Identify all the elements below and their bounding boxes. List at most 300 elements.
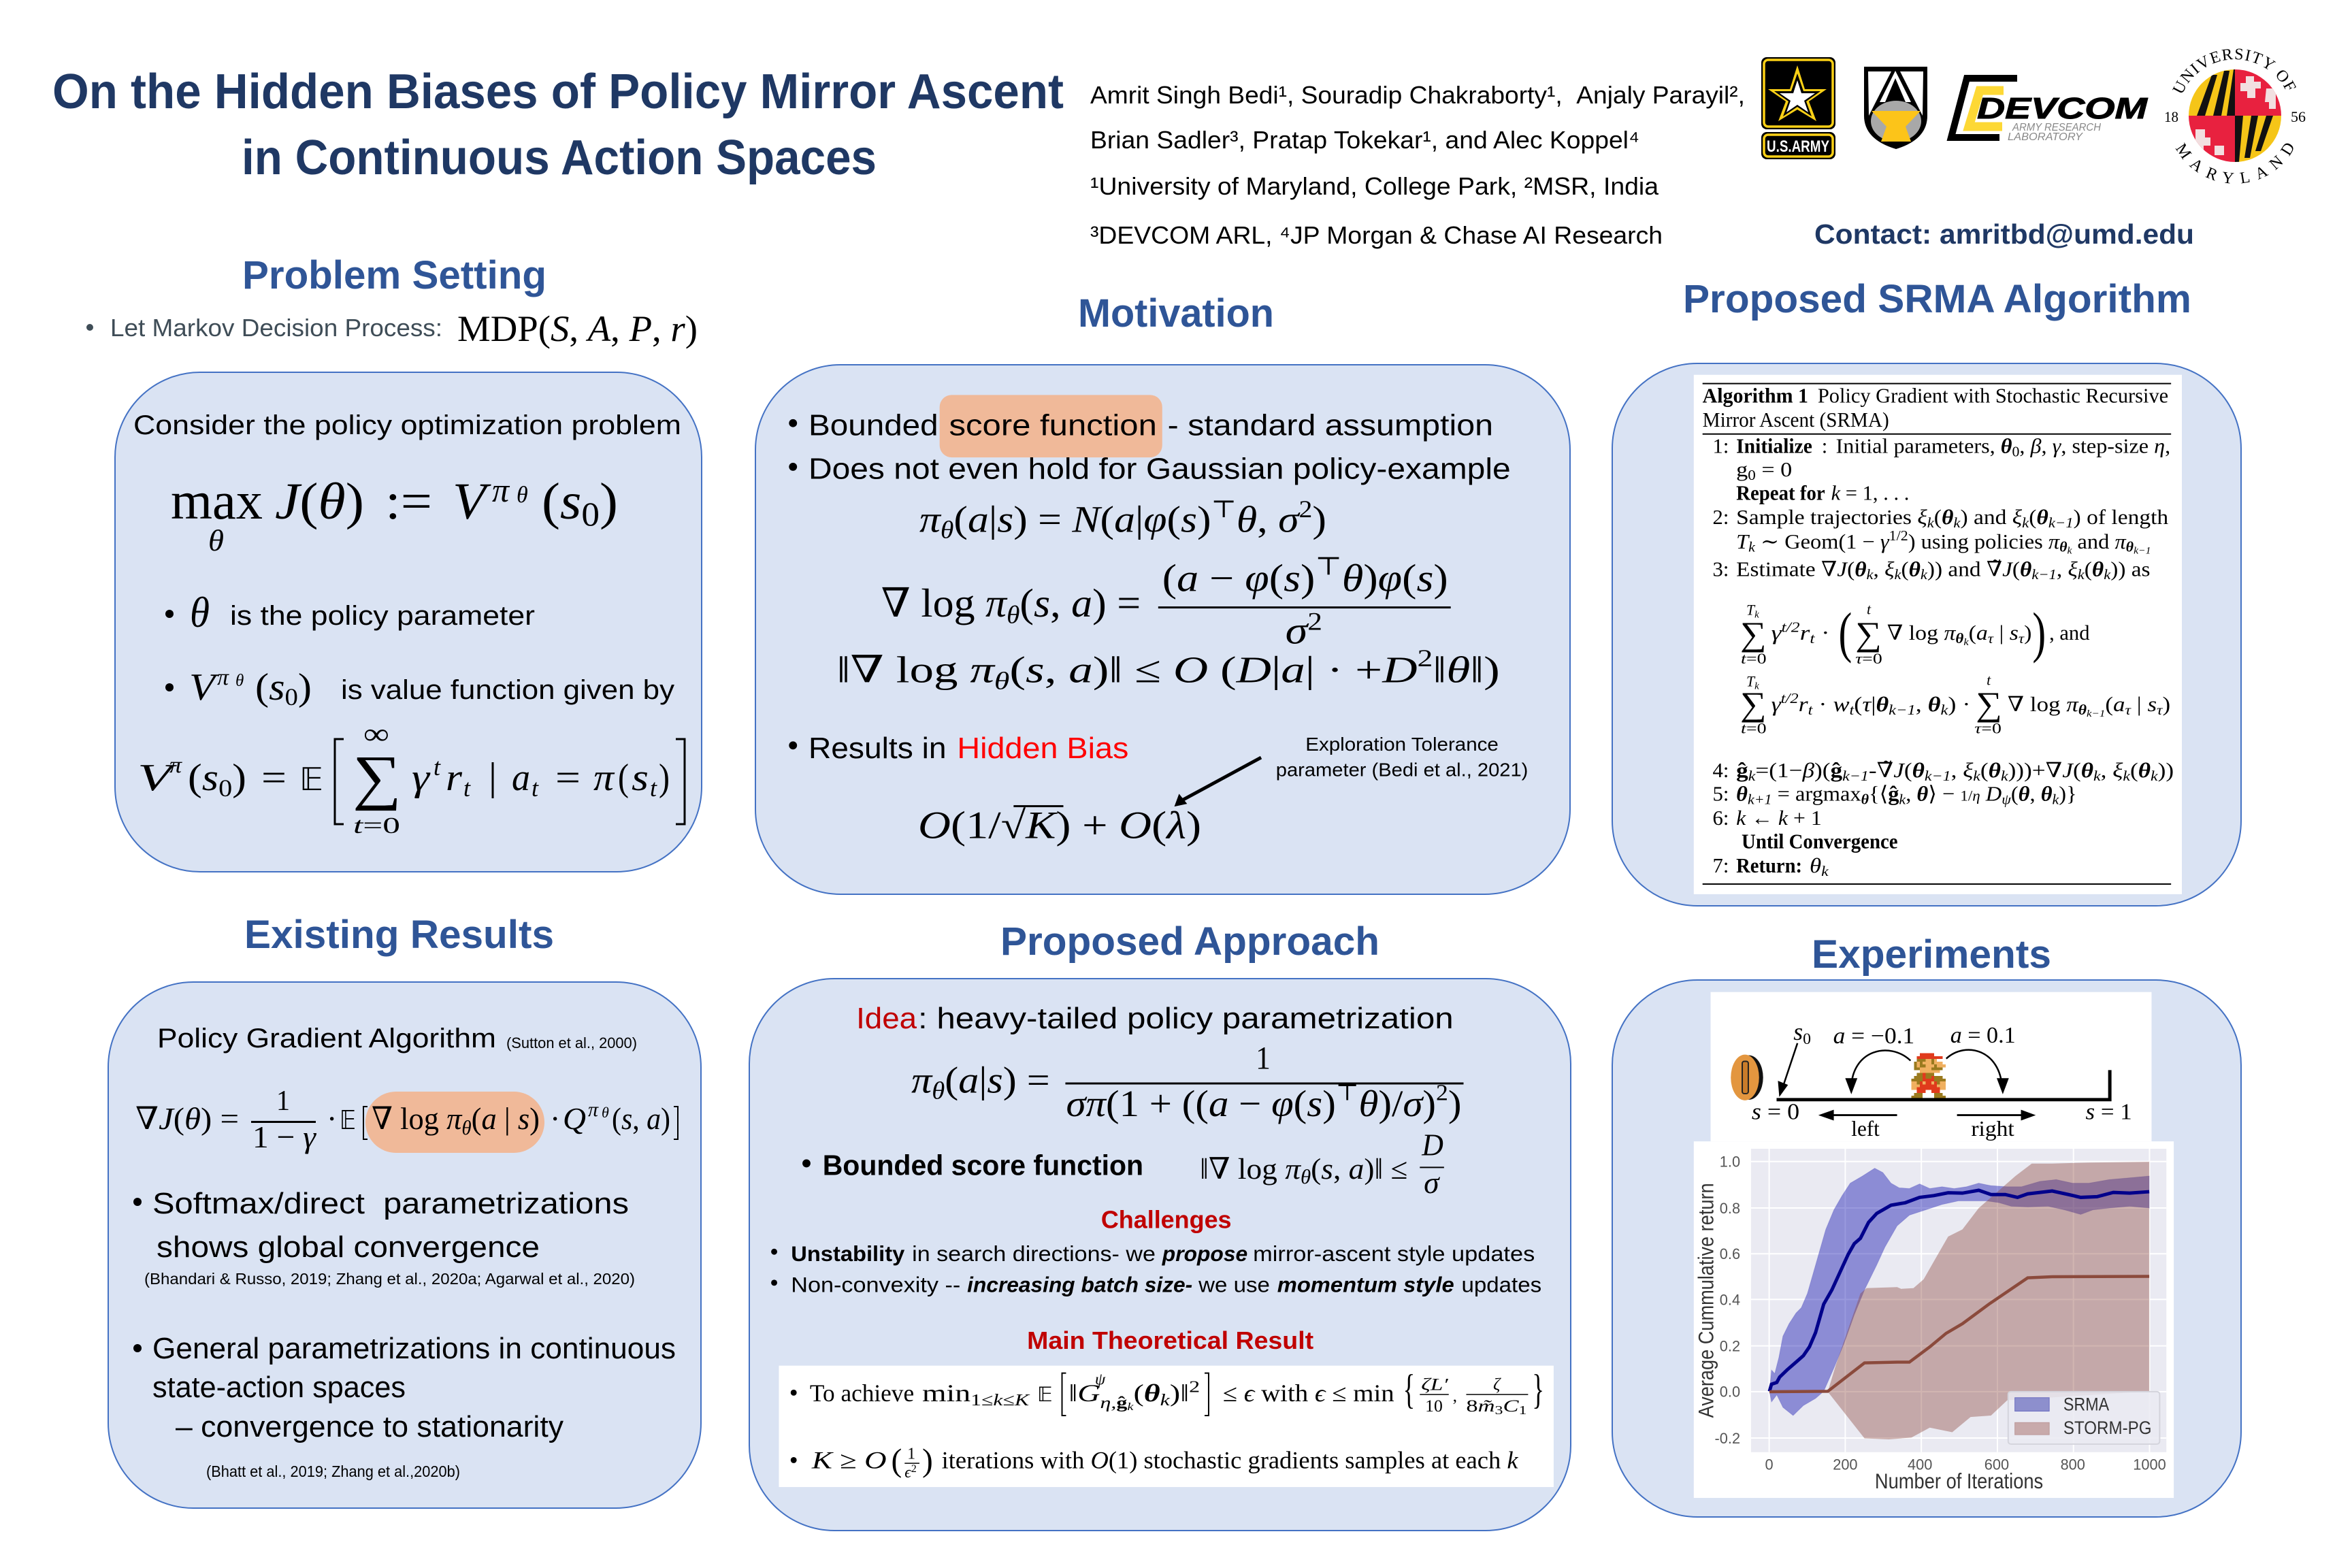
- algorithm steps: 0: [1748, 468, 1756, 483]
- algorithm steps 4 to 7: k: [1821, 864, 1829, 879]
- value function equation: t=0: [353, 813, 400, 838]
- policy gradient equation: Q: [563, 1101, 586, 1136]
- value function equation: [137, 717, 685, 838]
- bullet: softmax global convergence: (Bhandari & Russo, 2019; Zhang et al., 2020a; Agarwal et al., 2020): [144, 1270, 635, 1288]
- estimator sum 2: ,: [1916, 693, 1928, 716]
- algorithm steps: k: [2104, 568, 2111, 583]
- algorithm steps 4 to 7: 4:: [1713, 759, 1729, 782]
- estimator sum 2: k: [1940, 703, 1948, 718]
- value function equation: π: [169, 753, 182, 778]
- theorem box: k: [1160, 1391, 1171, 1409]
- algorithm steps 4 to 7: = argmax: [1771, 782, 1861, 805]
- diagram labels: [1752, 1018, 2132, 1141]
- estimator sum 1: τ: [2019, 632, 2025, 647]
- logo: University of Maryland seal: 56: [2291, 108, 2306, 125]
- algorithm steps: 1:: [1713, 434, 1729, 457]
- algorithm steps: :: [1822, 434, 1827, 457]
- Gaussian policy equation: , σ: [1257, 499, 1296, 540]
- policy gradient equation: ·: [550, 1101, 560, 1136]
- diagram labels: a = −0.1: [1833, 1024, 1914, 1049]
- estimator sum 2: ∑: [1740, 685, 1767, 723]
- algorithm steps: ,: [2057, 557, 2068, 581]
- algorithm steps: k: [1953, 516, 1961, 531]
- algorithm steps: 3:: [1713, 557, 1729, 581]
- bullet: bounded score function: - standard assumption: [1168, 410, 1493, 442]
- algorithm steps: k: [1748, 540, 1756, 555]
- bullet: hidden bias: Hidden Bias: [957, 732, 1128, 765]
- heading: Proposed SRMA Algorithm: Proposed SRMA Algorithm: [1683, 277, 2191, 321]
- logo: U.S. Army: U.S.ARMY: [1767, 137, 1829, 156]
- heavy-tailed policy equation: 2: [1436, 1080, 1448, 1105]
- heavy-tailed policy equation: θ: [1358, 1083, 1378, 1124]
- algorithm steps 4 to 7: k: [2123, 769, 2131, 784]
- theorem box: ,: [1453, 1386, 1457, 1405]
- policy gradient equation: θ: [602, 1104, 609, 1121]
- algorithm steps: ξ: [2012, 506, 2023, 529]
- bounded score function result: θ: [1301, 1166, 1311, 1188]
- theorem box: ‖G: [1068, 1379, 1095, 1407]
- bullet: policy parameter: [165, 588, 535, 636]
- Gaussian policy equation: ): [1312, 499, 1326, 540]
- estimator sum 2: ∑: [1976, 685, 2002, 723]
- Gaussian policy equation: 2: [1299, 495, 1312, 523]
- bullet: hidden bias: Results in: [808, 732, 947, 765]
- algorithm steps: ) and: [1960, 506, 2012, 529]
- algorithm steps 4 to 7: k−1: [1925, 769, 1951, 784]
- algorithm steps: Repeat for: [1736, 482, 1825, 505]
- challenges list: mirror-ascent style updates: [1253, 1241, 1535, 1266]
- algorithm steps: π: [2048, 530, 2061, 553]
- estimator sum 2: γ: [1771, 693, 1782, 716]
- score norm bound: θ: [994, 667, 1009, 694]
- heavy-tailed policy equation: σπ(1 + ((a − φ(s): [1066, 1083, 1335, 1124]
- theorem box: 𝔼: [1037, 1382, 1053, 1406]
- panel: existing results: [108, 982, 701, 1508]
- estimator sum 1: t/2: [1782, 620, 1800, 635]
- algorithm steps: )) as: [2110, 557, 2150, 581]
- algorithm steps: (: [2029, 506, 2036, 529]
- experiments contents: [1693, 992, 2174, 1498]
- bullet: value function: is value function given by: [341, 675, 674, 705]
- bounded score function result: D: [1421, 1127, 1443, 1162]
- theorem box: ϵ: [904, 1464, 911, 1482]
- algorithm title: Algorithm 1: [1703, 384, 1808, 407]
- theorem box: 8m̃: [1466, 1396, 1490, 1416]
- theorem box: iterations with O(1) stochastic gradients samples at each k: [942, 1446, 1519, 1473]
- authors and affiliations: Brian Sadler³, Pratap Tokekar¹, and Alec Koppel⁴: [1090, 126, 1639, 154]
- authors and affiliations: Amrit Singh Bedi¹, Souradip Chakraborty¹, Anjaly Parayil²,: [1090, 81, 1745, 109]
- value function equation: s: [632, 757, 649, 799]
- value function equation: =: [261, 757, 287, 799]
- objective equation: θ: [517, 483, 528, 508]
- estimator sum 1: k: [1963, 637, 1969, 648]
- heading: Proposed Approach: Proposed Approach: [1000, 919, 1379, 964]
- estimator sum 1: ·: [1815, 621, 1830, 644]
- heavy-tailed policy equation: [911, 1041, 1463, 1124]
- score norm bound: s, a)‖ ≤ O (D|a| · + D: [1026, 649, 1409, 691]
- value function equation: t: [650, 774, 657, 802]
- arrow: right: [1957, 1110, 2036, 1120]
- algorithm steps: ) using policies: [1908, 530, 2048, 553]
- heavy-tailed policy equation: a|s) =: [958, 1059, 1046, 1100]
- algorithm steps: k−1: [2134, 546, 2151, 557]
- estimator sum 1: a: [1976, 621, 1988, 644]
- estimator sum 2: ∇ log π: [2008, 693, 2077, 716]
- algorithm steps 4 to 7: k: [1973, 769, 1981, 784]
- value function equation: ): [232, 757, 246, 799]
- algorithm steps: Initialize: [1736, 434, 1812, 457]
- algorithm steps 4 to 7: ξ: [1963, 759, 1974, 782]
- logo: DEVCOM Army Research Laboratory: [1951, 78, 2149, 143]
- estimator sum 1: ): [2024, 621, 2031, 644]
- chart axes labels: 0.6: [1720, 1245, 1740, 1262]
- estimator sum 1: r: [1800, 621, 1811, 644]
- policy gradient equation: ∇ log π: [372, 1101, 462, 1136]
- estimator sum 2: k−1: [1889, 703, 1916, 718]
- score function equation: σ: [1286, 609, 1309, 652]
- estimator sum 1: ∇ log π: [1887, 621, 1955, 644]
- algorithm steps 4 to 7: ĝ: [1736, 759, 1749, 782]
- estimator sum 2: [1740, 672, 2170, 737]
- challenges list: momentum style: [1277, 1273, 1454, 1297]
- track: [1776, 1070, 2110, 1100]
- estimator sum 2: θ: [2078, 703, 2087, 718]
- arrow: left: [1818, 1110, 1897, 1120]
- challenges list: Non-convexity --: [791, 1273, 960, 1297]
- algorithm steps: )) and: [1927, 557, 1987, 581]
- estimator sum 1: s: [2010, 621, 2019, 644]
- algorithm steps: ∇̃J(θ: [1987, 557, 2031, 581]
- value function equation: 𝔼: [299, 761, 323, 798]
- policy gradient heading: (Sutton et al., 2000): [506, 1034, 637, 1051]
- estimator sum 1: ): [2032, 601, 2046, 664]
- Gaussian policy equation: ⊤: [1211, 495, 1237, 523]
- bullet: general parametrizations: – convergence to stationarity: [176, 1410, 564, 1443]
- arrow: move left arc: [1845, 1050, 1910, 1094]
- bounded score function result: Bounded score function: [823, 1149, 1143, 1181]
- algorithm steps: ξ: [1884, 557, 1895, 581]
- challenges list: in search directions- we: [912, 1241, 1156, 1266]
- challenges list: [771, 1241, 1541, 1297]
- chart axes labels: 1.0: [1720, 1154, 1740, 1171]
- value function equation: r: [446, 757, 462, 799]
- estimator sum 2: t/2: [1781, 691, 1799, 706]
- algorithm steps 4 to 7: θ: [1736, 782, 1748, 805]
- bullet: general parametrizations: [133, 1332, 676, 1480]
- algorithm steps: T: [1736, 530, 1750, 553]
- algorithm steps 4 to 7: θ⟩ − 1/η D: [1916, 782, 2001, 805]
- estimator sum 2: t: [1850, 703, 1855, 718]
- estimator sum 2: τ: [2125, 703, 2132, 718]
- challenges list: Unstability: [791, 1241, 905, 1266]
- algorithm steps: θ: [1909, 557, 1921, 581]
- authors and affiliations: ³DEVCOM ARL, ⁴JP Morgan & Chase AI Research: [1090, 221, 1663, 249]
- theorem box: C: [1503, 1396, 1520, 1416]
- bounded score function result: ‖∇ log π: [1200, 1153, 1300, 1186]
- policy gradient equation: 1 − γ: [252, 1120, 317, 1154]
- estimator sum 1: ∑: [1740, 615, 1767, 653]
- bullet: softmax global convergence: Softmax/direct parametrizations: [152, 1187, 629, 1220]
- policy gradient equation: 1: [276, 1085, 290, 1117]
- algorithm title: Mirror Ascent (SRMA): [1703, 408, 1889, 431]
- value function equation: t: [463, 774, 471, 802]
- algorithm steps: k: [2078, 568, 2085, 583]
- diagram labels: a = 0.1: [1950, 1023, 2016, 1048]
- bullet: hidden bias: [789, 732, 1128, 765]
- diagram labels: left: [1851, 1117, 1880, 1141]
- algorithm steps: k−1: [2031, 568, 2057, 583]
- bullet: policy parameter: is the policy parameter: [230, 601, 535, 631]
- bounded score function result: s, a)‖ ≤: [1321, 1153, 1406, 1186]
- diagram labels: s: [1793, 1018, 1803, 1045]
- objective equation: J(θ): [275, 473, 364, 530]
- policy gradient equation: ∇J(θ) =: [135, 1101, 239, 1136]
- value function equation: γ: [412, 757, 431, 799]
- estimator sum 2: w: [1833, 693, 1850, 716]
- bullet: value function: θ: [235, 672, 244, 690]
- authors and affiliations: ¹University of Maryland, College Park, ²MSR, India: [1090, 172, 1659, 200]
- value function equation: ∞: [363, 717, 389, 751]
- problem statement text: Consider the policy optimization problem: [133, 410, 681, 440]
- bullet: value function: [165, 665, 674, 710]
- value function equation: t: [532, 774, 539, 802]
- score function equation: θ: [1342, 557, 1363, 600]
- estimator sum 1: τ=0: [1855, 651, 1882, 667]
- contact: Contact: amritbd@umd.edu: [1814, 218, 2194, 250]
- logo: DEVCOM Army Research Laboratory: ARMY RESEARCH: [2012, 122, 2101, 133]
- chart axes labels: -0.2: [1715, 1430, 1740, 1447]
- value function equation: V: [137, 757, 177, 799]
- algorithm steps: θ: [1942, 506, 1953, 529]
- value function equation: π: [593, 757, 615, 799]
- diagram labels: right: [1971, 1117, 2014, 1141]
- main theoretical result heading: Main Theoretical Result: [1027, 1327, 1313, 1354]
- algorithm steps 4 to 7: J(θ: [1893, 759, 1923, 782]
- logo: DEVCOM Army Research Laboratory: DEVCOM: [1977, 92, 2149, 125]
- chart axes labels: 400: [1908, 1456, 1932, 1473]
- bounded score function result: (: [1311, 1153, 1321, 1186]
- heavy-tailed policy equation: )/σ): [1378, 1083, 1435, 1124]
- chart axes labels: 200: [1833, 1456, 1858, 1473]
- algorithm steps 4 to 7: Until Convergence: [1742, 830, 1898, 853]
- score norm bound: ‖: [1433, 649, 1446, 691]
- bullet: bounded score function: [789, 410, 1493, 442]
- estimator sum 2: k−1: [2087, 708, 2105, 719]
- algorithm steps: θ: [2036, 506, 2048, 529]
- heading: Experiments: Experiments: [1812, 932, 2051, 977]
- algorithm steps 4 to 7: ,: [2101, 759, 2112, 782]
- theorem box: θ: [1144, 1379, 1160, 1407]
- bullet: value function: ): [298, 666, 312, 708]
- algorithm steps 4 to 7: )}: [2059, 782, 2077, 805]
- algorithm steps 4 to 7: θ: [2138, 759, 2151, 782]
- panel: experiments: [1612, 980, 2241, 1517]
- chart legend: STORM-PG: [2063, 1418, 2151, 1438]
- algorithm steps 4 to 7: (: [2011, 782, 2019, 805]
- policy gradient heading: Policy Gradient Algorithm: [157, 1024, 496, 1054]
- algorithm steps: Initial parameters, θ: [1836, 434, 2012, 457]
- score function equation: [881, 553, 1451, 652]
- bullet: value function: 0: [285, 683, 298, 710]
- objective equation: :=: [385, 473, 432, 530]
- estimator sum 2: ) ·: [1948, 693, 1970, 716]
- estimator sum 1: τ: [1988, 632, 1995, 647]
- estimator sum 2: (: [1854, 693, 1862, 716]
- score function equation: 2: [1307, 608, 1322, 636]
- algorithm steps 4 to 7: )): [2158, 759, 2174, 782]
- algorithm steps 4 to 7: ,: [1951, 759, 1963, 782]
- theorem box: 3: [1495, 1403, 1503, 1417]
- algorithm steps 4 to 7: k: [2053, 792, 2059, 807]
- algorithm steps 4 to 7: -∇̃: [1869, 759, 1893, 782]
- environment diagram: [1711, 992, 2151, 1141]
- bullet: softmax global convergence: [133, 1187, 635, 1288]
- idea sentence: Idea: [856, 1002, 917, 1035]
- algorithm steps: γ: [1880, 530, 1890, 553]
- annotation: exploration tolerance: parameter (Bedi et al., 2021): [1276, 760, 1528, 781]
- algorithm steps: θ: [2092, 557, 2104, 581]
- heavy-tailed policy equation: π: [911, 1059, 934, 1100]
- score norm bound: θ‖): [1446, 649, 1493, 691]
- objective equation: π: [492, 471, 510, 509]
- score function equation: (: [1019, 581, 1034, 625]
- logo: U.S. Army: [1761, 57, 1835, 159]
- convergence rate equation: O(1/√ K) + O(λ): [918, 804, 1201, 847]
- algorithm steps 4 to 7: ĝ: [1888, 782, 1899, 805]
- estimator sum 1: k: [1754, 610, 1759, 621]
- algorithm steps 4 to 7: β)(ĝ: [1803, 759, 1841, 782]
- algorithm steps: k: [1921, 568, 1928, 583]
- bullet: general parametrizations: state-action spaces: [152, 1371, 406, 1404]
- estimator sum 1: T: [1746, 602, 1754, 619]
- estimator sum 1: ∑: [1855, 615, 1882, 653]
- chart axes labels: 800: [2061, 1456, 2085, 1473]
- value function equation: (s: [188, 757, 217, 799]
- objective equation: max: [171, 471, 263, 530]
- chart axes labels: 0.0: [1720, 1384, 1740, 1401]
- chart axes labels: 1000: [2133, 1456, 2166, 1473]
- algorithm steps: ,: [1874, 557, 1884, 581]
- algorithm title: [1703, 384, 2168, 431]
- objective equation: 0: [581, 495, 600, 533]
- theorem box: ζ: [1493, 1374, 1501, 1394]
- icon: mario: [1911, 1054, 1946, 1098]
- algorithm steps 4 to 7: {⟨: [1869, 782, 1888, 805]
- value function equation: t: [434, 753, 441, 781]
- algorithm box: [1694, 375, 2182, 894]
- algorithm steps: θ: [2126, 540, 2134, 555]
- estimator sum 2: (: [2105, 693, 2113, 716]
- estimator sum 1: t=0: [1741, 651, 1767, 667]
- estimator sum 2: ·: [1812, 693, 1833, 716]
- algorithm steps: ,: [2019, 434, 2025, 457]
- theorem box: 2: [911, 1463, 917, 1475]
- bullet: bounded score function: score function: [949, 410, 1157, 442]
- heading: Existing Results: Existing Results: [244, 913, 554, 957]
- algorithm steps 4 to 7: k: [1748, 769, 1756, 784]
- algorithm steps 4 to 7: J(θ: [2062, 759, 2092, 782]
- theorem box: η,: [1100, 1394, 1116, 1412]
- algorithm steps: β, γ, step-size η,: [2031, 434, 2170, 457]
- panel: problem setting: [115, 372, 702, 872]
- heading: Motivation: Motivation: [1078, 291, 1274, 336]
- algorithm steps 4 to 7: Return:: [1736, 854, 1802, 877]
- algorithm steps: ξ: [2068, 557, 2078, 581]
- estimator sum 1: [1740, 601, 2089, 667]
- chart axes labels: Number of Iterations: [1875, 1469, 2043, 1493]
- algorithm steps: k: [2067, 546, 2072, 557]
- arrow: s0 pointer: [1778, 1043, 1797, 1097]
- estimator sum 2: |: [2131, 693, 2147, 716]
- estimator sum 1: |: [1993, 621, 2010, 644]
- algorithm steps 4 to 7: 7:: [1713, 854, 1729, 877]
- logo: University of Maryland seal: UNIVERSITY OF: [2172, 49, 2296, 93]
- chart axes labels: 0.4: [1720, 1291, 1740, 1308]
- chart axes labels: 0.2: [1720, 1338, 1740, 1355]
- algorithm steps: and: [2072, 530, 2114, 553]
- policy gradient equation: θ: [461, 1117, 472, 1139]
- algorithm steps 4 to 7: k ← k + 1: [1736, 806, 1822, 830]
- authors and affiliations: [1090, 81, 1745, 249]
- estimator sum 1: (: [1838, 601, 1852, 664]
- chart axes labels: 0.8: [1720, 1200, 1740, 1217]
- policy gradient equation: (: [472, 1101, 481, 1136]
- chart axes labels: Average Cummulative return: [1693, 1183, 1718, 1418]
- title: On the Hidden Biases of Policy Mirror Ascent: [52, 65, 1064, 119]
- algorithm steps 4 to 7: k−1: [1842, 769, 1869, 784]
- algorithm steps: k: [1867, 568, 1874, 583]
- theorem box: (: [892, 1443, 902, 1478]
- chart legend: SRMA: [2063, 1394, 2109, 1415]
- estimator sum 1: θ: [1955, 632, 1964, 647]
- chart axes labels: [1693, 1154, 2166, 1493]
- theorem box: ): [922, 1443, 933, 1478]
- diagram labels: s = 1: [2086, 1100, 2132, 1124]
- title: [52, 65, 1064, 185]
- objective equation: θ: [208, 524, 224, 557]
- challenges list: updates: [1462, 1273, 1541, 1297]
- estimator sum 2: a: [2113, 693, 2125, 716]
- algorithm title: Policy Gradient with Stochastic Recursive: [1818, 384, 2168, 407]
- MDP bullet: [86, 308, 698, 349]
- chart: cumulative return: [1693, 1141, 2174, 1498]
- heavy-tailed policy equation: (: [945, 1059, 958, 1100]
- logo: DEVCOM Army Research Laboratory: LABORATORY: [2008, 131, 2083, 143]
- policy gradient equation: π: [588, 1098, 599, 1121]
- estimator sum 2: k: [1754, 681, 1759, 691]
- score norm bound: 2: [1418, 644, 1433, 672]
- algorithm steps: g: [1736, 458, 1746, 481]
- algorithm steps: 2:: [1713, 506, 1729, 529]
- objective equation: ): [600, 473, 618, 530]
- estimator sum 2: τ: [2157, 703, 2163, 718]
- Gaussian policy equation: θ: [1237, 499, 1257, 540]
- policy gradient equation: 𝔼: [340, 1105, 356, 1135]
- theorem box: {: [1403, 1367, 1415, 1413]
- title: in Continuous Action Spaces: [242, 131, 877, 185]
- theorem box: 1: [907, 1445, 915, 1463]
- bullet: policy parameter: θ: [190, 588, 210, 636]
- estimator sum 2: T: [1746, 673, 1754, 689]
- algorithm steps 4 to 7: [1713, 759, 2174, 879]
- score norm bound: ‖∇ log π: [836, 649, 989, 691]
- panel: motivation: [755, 365, 1570, 894]
- algorithm steps 4 to 7: =(1−: [1755, 759, 1803, 782]
- algorithm steps: k: [1894, 568, 1901, 583]
- value function equation: (: [618, 757, 629, 799]
- algorithm steps: ) of length: [2074, 506, 2168, 529]
- bullet: softmax global convergence: shows global convergence: [157, 1230, 540, 1264]
